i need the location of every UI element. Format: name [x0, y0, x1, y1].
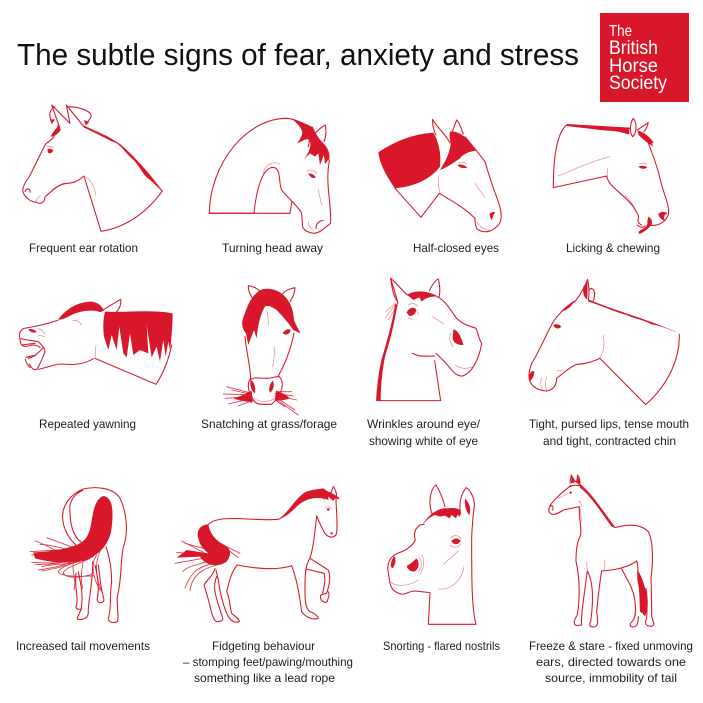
- icon: horse with tight pursed lips: [529, 279, 679, 405]
- logo: The British Horse Society: [600, 13, 689, 102]
- icon: horse with half-closed eyes: [378, 119, 501, 232]
- icon: horse turning head away: [209, 118, 331, 233]
- label: fidgeting behaviour: [183, 639, 353, 685]
- label: snatching at grass/forage: Snatching at grass/forage: [201, 417, 337, 431]
- label: wrinkles around eye, showing white of eye: [367, 417, 481, 448]
- label: licking and chewing: Licking & chewing: [566, 241, 660, 255]
- icon: horse snorting with flared nostrils: [388, 485, 476, 624]
- label: tight pursed lips, tense mouth, contracted chin: [529, 417, 689, 448]
- label: increased tail movements: Increased tail movements: [16, 639, 150, 653]
- icon: horse repeatedly yawning: [19, 299, 173, 384]
- label: wrinkles around eye, showing white of eye: Wrinkles around eye/: [367, 417, 481, 431]
- label: fidgeting behaviour: – stomping feet/pawing/mouthing: [183, 655, 353, 669]
- label: freeze and stare: ears, directed towards one: [536, 655, 686, 669]
- label: wrinkles around eye, showing white of eye: showing white of eye: [369, 434, 478, 448]
- label: frequent ear rotation: Frequent ear rotation: [29, 241, 138, 255]
- logo: The British Horse Society: Horse: [609, 56, 658, 77]
- logo: The British Horse Society: British: [609, 38, 658, 59]
- icon: horse snatching at grass or forage: [223, 286, 301, 415]
- label: repeated yawning: Repeated yawning: [39, 417, 136, 431]
- label: freeze and stare: Freeze & stare - fixed unmoving: [529, 639, 693, 653]
- label: half-closed eyes: Half-closed eyes: [413, 241, 499, 255]
- logo: The British Horse Society: The: [609, 23, 632, 40]
- label: fidgeting behaviour: something like a lead rope: [194, 671, 335, 685]
- label: tight pursed lips, tense mouth, contracted chin: Tight, pursed lips, tense mouth: [529, 417, 689, 431]
- label: freeze and stare: source, immobility of tail: [545, 671, 677, 685]
- label: fidgeting behaviour: Fidgeting behaviour: [212, 639, 315, 653]
- title: The subtle signs of fear, anxiety and stress: [17, 37, 579, 72]
- icon: horse licking and chewing: [553, 118, 669, 234]
- icon: fidgeting horse with raised foreleg: [175, 487, 340, 622]
- icon: horse with wrinkles around eye showing white: [377, 278, 482, 401]
- label: turning head away: Turning head away: [222, 241, 323, 255]
- logo: The British Horse Society: Society: [609, 73, 667, 94]
- icon: horse head with rotating ears: [23, 105, 162, 231]
- icon: horse rear view with increased tail movements: [30, 488, 126, 623]
- label: tight pursed lips, tense mouth, contracted chin: and tight, contracted chin: [543, 434, 676, 448]
- label: freeze and stare: [529, 639, 693, 685]
- icon: horse freezing and staring: [549, 475, 654, 627]
- label: snorting, flared nostrils: Snorting - flared nostrils: [383, 639, 500, 653]
